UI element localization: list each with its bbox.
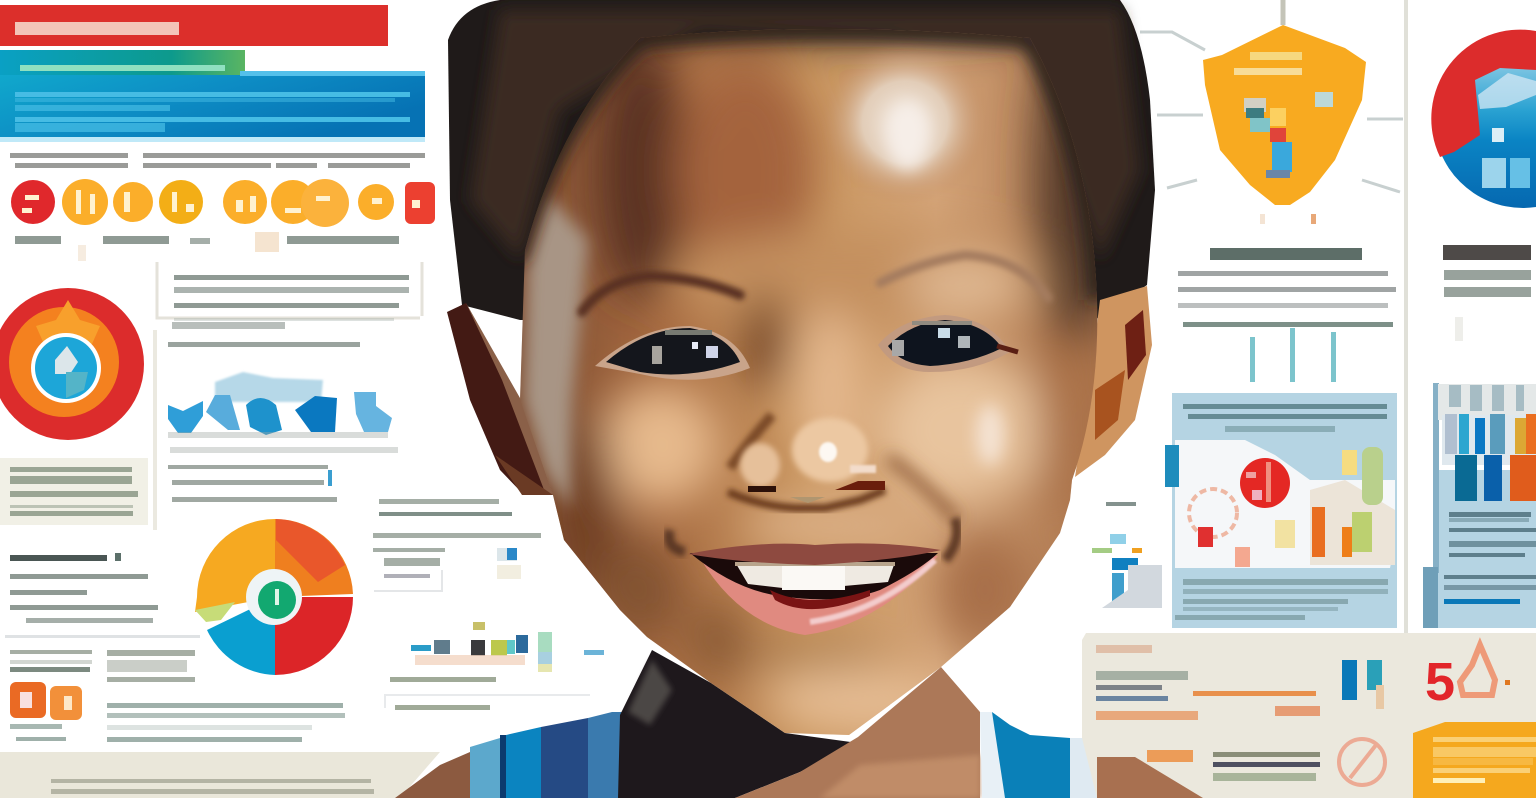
illustration: clinic scene (1165, 440, 1395, 568)
text lines: lower stats (1213, 752, 1320, 781)
text block: left of pie (5, 553, 200, 638)
illustration: smiling child portrait (395, 0, 1203, 798)
heading and text: right column (1443, 245, 1531, 341)
panel: right infographic column (1082, 0, 1536, 798)
eye: right (878, 315, 1018, 372)
icon: small heart (1198, 527, 1213, 547)
text block: intro lines (10, 153, 425, 168)
panel: light blue health panel (1165, 393, 1397, 628)
text lines: lower left (10, 703, 345, 742)
chart: pie with clock centre (195, 519, 353, 675)
forehead highlight (832, 50, 974, 188)
chart: red and orange ring gauge (0, 288, 144, 440)
right arm (1097, 757, 1203, 798)
eyebrows (582, 255, 1048, 312)
shirt: left side (470, 712, 625, 798)
text block: salmon label (1096, 645, 1152, 653)
footer band (0, 752, 440, 798)
heading: red title banner (0, 5, 388, 46)
shirt: right side (980, 712, 1097, 798)
nose (728, 415, 957, 520)
teal connector lines (1250, 328, 1336, 382)
icon: small orange text (1147, 750, 1193, 762)
ear: left (447, 303, 553, 495)
text lines at panel top (1183, 404, 1387, 432)
ear: right (1075, 286, 1152, 477)
icon: figure on shield (1244, 92, 1333, 178)
illustration: person figure (1092, 502, 1162, 608)
text lines below note (168, 322, 360, 347)
text lines: lab panel (1444, 512, 1536, 604)
icon: red medical badge (1240, 458, 1290, 508)
illustration: group of children (411, 622, 604, 672)
stat number: 5 (1425, 652, 1455, 712)
cheek highlight (976, 405, 1004, 465)
mouth (669, 518, 957, 635)
lower lip (700, 556, 938, 635)
text block: description (1178, 271, 1396, 327)
text block: bordered note (157, 262, 422, 321)
face (520, 29, 1097, 735)
icon: dashed ring (1189, 489, 1237, 537)
icon: orange badges (10, 682, 82, 720)
neck: dark shadow (618, 650, 858, 798)
vertical divider (1404, 0, 1408, 640)
hair (448, 0, 1155, 320)
chart: blue circle with red arc (1431, 30, 1536, 208)
panel: beige statistics panel (1082, 633, 1536, 798)
text block: blue summary panel (0, 71, 425, 142)
panel: left infographic column (0, 5, 604, 798)
subheading: teal-green ribbon (0, 50, 245, 76)
panel: beige note box (0, 458, 148, 525)
icon: blue figures (1342, 660, 1384, 709)
panel: lab tubes and text (1423, 383, 1536, 628)
heading: centre title (1210, 248, 1362, 260)
neck: skin (735, 667, 980, 798)
gray sheen on temple (524, 195, 588, 510)
hair: soft fringe (470, 10, 1140, 260)
hairline shadow (515, 29, 1097, 300)
icon: ring (1339, 739, 1385, 785)
small table (10, 650, 195, 682)
text lines at panel bottom (1175, 579, 1388, 620)
mouth interior (690, 553, 938, 599)
face shading (515, 0, 1115, 730)
illustration: blue waves (168, 372, 392, 435)
text lines below figures (385, 677, 590, 710)
icon row: orange and red badges (11, 179, 435, 227)
teeth (735, 562, 895, 590)
icon: salmon flame (1460, 645, 1495, 695)
upper lip (688, 543, 941, 565)
icon: test tubes (1442, 385, 1536, 501)
icon: orange shield (1203, 25, 1366, 205)
left arm (395, 752, 470, 798)
labels under badges (15, 232, 399, 261)
text block: right of pie (373, 499, 541, 591)
connectors around shield (1140, 0, 1403, 192)
text lines: stats (1096, 671, 1320, 720)
callout: yellow card (1413, 722, 1536, 798)
text lines under waves (168, 432, 398, 502)
small marks under shield (1260, 214, 1316, 224)
eye: left (595, 326, 750, 380)
